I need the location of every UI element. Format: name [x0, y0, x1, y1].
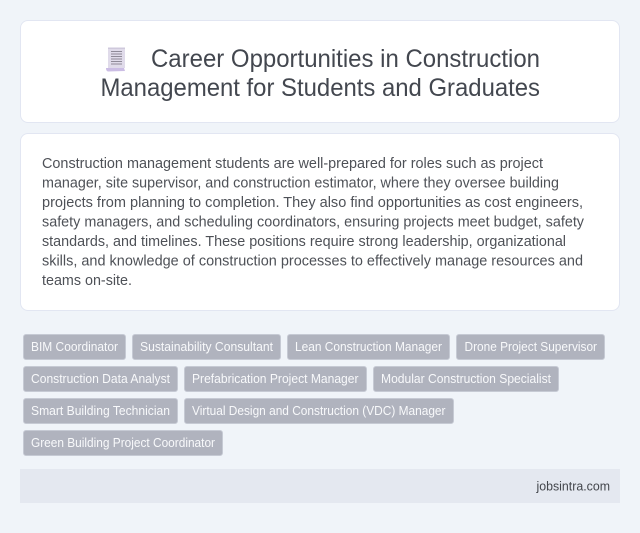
tag labels: Construction Data Analyst	[31, 372, 171, 386]
description text: manager, site supervisor, and construction estimator, where they oversee building	[42, 174, 559, 192]
description text: skills, and knowledge of construction processes to effectively manage resources and	[42, 252, 583, 270]
tag labels: Modular Construction Specialist	[381, 372, 552, 386]
tag labels	[31, 340, 597, 450]
tag labels: Lean Construction Manager	[295, 340, 442, 354]
description text: projects from planning to completion. They also find opportunities as cost engineers,	[42, 194, 583, 211]
title: Management for Students and Graduates	[100, 74, 540, 102]
description text	[42, 155, 584, 289]
tag labels: Sustainability Consultant	[140, 340, 274, 354]
icon: document scroll	[106, 48, 125, 72]
tag labels: Drone Project Supervisor	[464, 340, 597, 354]
description text: Construction management students are well-prepared for roles such as project	[42, 155, 544, 172]
title	[100, 45, 540, 102]
title: Career Opportunities in Construction	[151, 45, 540, 73]
tag labels: Virtual Design and Construction (VDC) Manager	[192, 404, 446, 418]
tag labels: Green Building Project Coordinator	[31, 436, 215, 450]
tag labels: Prefabrication Project Manager	[192, 372, 358, 386]
panel: description	[20, 133, 620, 311]
description text: teams on-site.	[42, 272, 132, 289]
description text: safety managers, and scheduling coordinators, ensuring projects meet budget, safety	[42, 214, 584, 230]
tag labels: BIM Coordinator	[31, 340, 118, 354]
panel: header	[20, 20, 620, 123]
footer bar	[20, 469, 620, 503]
footer source text: jobsintra.com	[536, 480, 610, 494]
description text: standards, and timelines. These positions require strong leadership, organizational	[42, 233, 566, 250]
tag labels: Smart Building Technician	[31, 404, 170, 418]
